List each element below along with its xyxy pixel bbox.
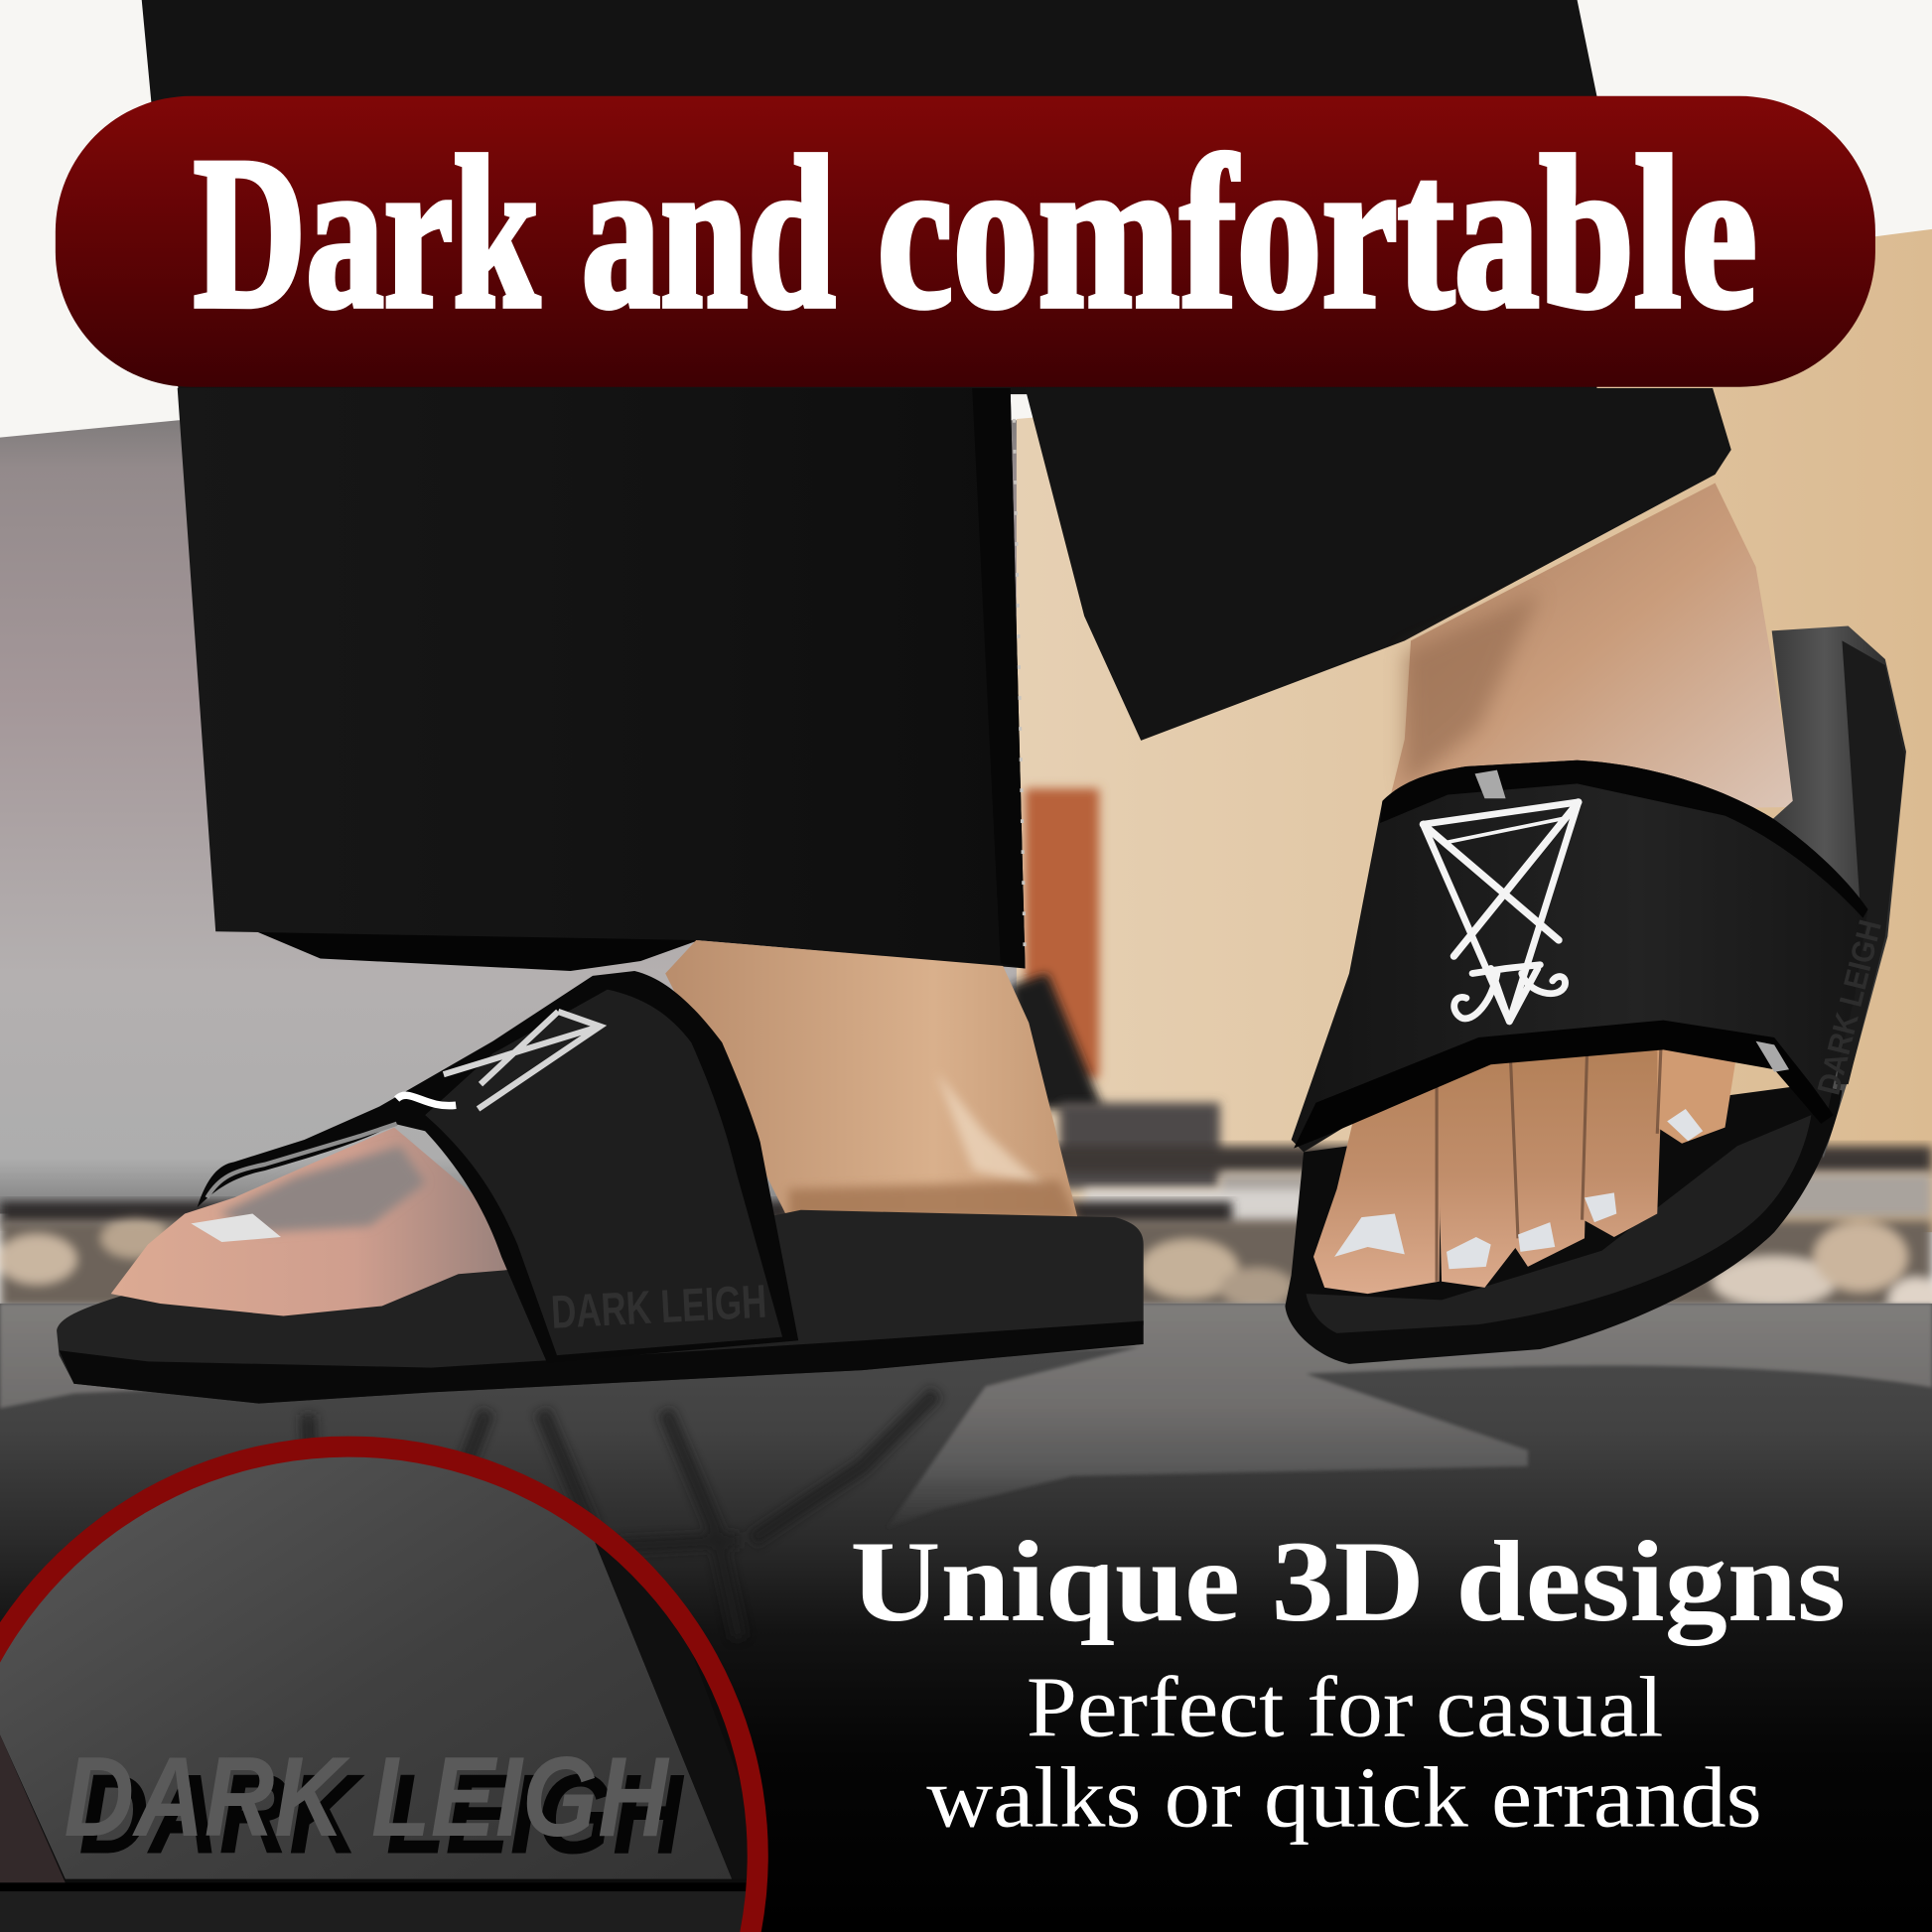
right slide: toes [1313,1035,1739,1294]
caption line one: Perfect for casual [1027,1660,1663,1755]
right slide: upper rim [1380,760,1867,918]
sigil shadow on ground [308,1392,936,1639]
sunlit concrete [0,1304,1932,1528]
left slide: sole lip [60,1320,1144,1404]
inset: dark strap edge [596,1543,729,1870]
title banner [56,96,1875,387]
title text: and [582,113,835,353]
concrete ground fading to black [0,1304,1932,1932]
title text [194,113,1757,353]
left slide: sigil [397,1012,600,1109]
caption text [850,1518,1846,1845]
right slide: sole [1285,1084,1842,1364]
left slide: embossed logo: DARK LEIGH [550,1275,767,1338]
trouser under-fold [256,931,702,971]
inset: red ring [0,1437,768,1932]
right slide: embossed logo: DARK LEIGH [1811,916,1888,1098]
left slide [57,971,1144,1404]
right foot ankle [1386,483,1796,813]
inset: embossed brand: DARK LEIGH [65,1734,670,1861]
caption heading: Unique 3D designs [850,1518,1846,1646]
inset: strap surface [0,1417,732,1879]
caption line two: walks or quick errands [926,1749,1762,1845]
right slide [1285,625,1906,1364]
inset: embossed brand shadow: DARK LEIGH [78,1752,685,1878]
left slide: shaded toes [219,1146,425,1232]
right slide: toenails [1334,1109,1703,1269]
right slide: lower rim [1294,1021,1834,1149]
right slide: strap [1292,760,1867,1152]
right slide: sigil [1423,802,1579,1022]
left slide: strap [198,971,798,1363]
left slide: big toenail [191,1213,281,1242]
left slide: sole [57,1210,1144,1404]
inset: toe sliver [0,1734,66,1882]
right slide: heel cup [1725,625,1906,1159]
left foot heel [665,940,1078,1220]
circular detail inset [0,1417,776,1932]
title text: Dark [194,113,540,353]
trousers [142,0,1731,973]
left slide: toes [111,1128,517,1315]
pebbles [0,1218,1932,1322]
